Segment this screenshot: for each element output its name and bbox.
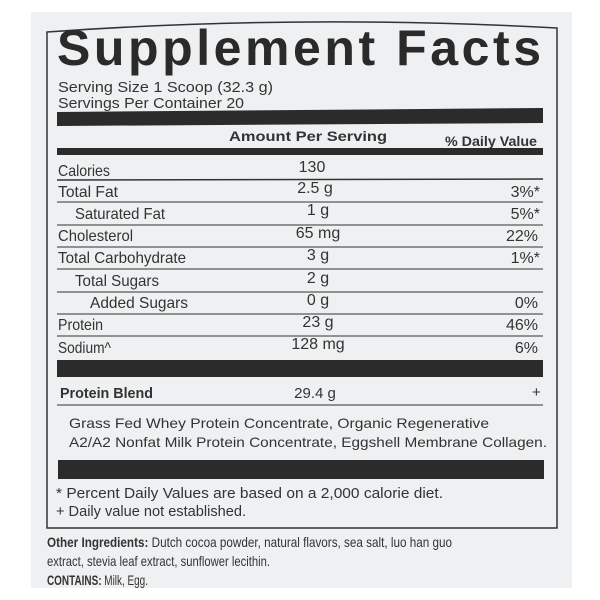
column header: [229, 128, 537, 149]
nutrient rows: Total Fat: [58, 184, 119, 201]
nutrient rows: 2.5 g: [297, 180, 333, 197]
header bar: [57, 148, 543, 155]
nutrient rows: Total Sugars: [75, 273, 159, 290]
nutrient rows: 22%: [506, 228, 538, 245]
facts box: [47, 20, 557, 528]
middle thick bar: [57, 360, 543, 377]
nutrient rows: Total Carbohydrate: [58, 250, 186, 267]
nutrient rows: [57, 159, 543, 357]
nutrient rows: 3 g: [307, 247, 329, 264]
nutrient rows: 2 g: [307, 270, 329, 287]
nutrient rows: 1 g: [307, 202, 329, 219]
serving info: Serving Size 1 Scoop (32.3 g): [58, 79, 273, 96]
serving info: Servings Per Container 20: [58, 95, 244, 112]
lower thick bar: [58, 460, 544, 479]
other ingredients: extract, stevia leaf extract, sunflower lecithin.: [47, 553, 270, 569]
footnotes: * Percent Daily Values are based on a 2,000 calorie diet.: [56, 485, 443, 502]
column header: % Daily Value: [445, 133, 537, 149]
nutrient rows: 5%*: [511, 206, 540, 223]
blend ingredients: A2/A2 Nonfat Milk Protein Concentrate, Eggshell Membrane Collagen.: [69, 434, 547, 450]
nutrient rows: 23 g: [302, 314, 334, 331]
other ingredients: CONTAINS: Milk, Egg.: [47, 572, 148, 588]
protein blend: +: [532, 384, 541, 401]
nutrient rows: Sodium^: [58, 340, 111, 357]
footnotes: [56, 485, 443, 520]
nutrient rows: 1%*: [511, 250, 540, 267]
nutrient rows: Added Sugars: [90, 295, 188, 312]
protein blend: [57, 384, 543, 405]
nutrient rows: Calories: [58, 163, 110, 180]
nutrient rows: 65 mg: [296, 225, 340, 242]
title: Supplement Facts: [57, 20, 541, 76]
other ingredients: [47, 534, 452, 588]
protein blend: Protein Blend: [60, 385, 153, 402]
nutrient rows: 0 g: [307, 292, 329, 309]
protein blend: 29.4 g: [294, 385, 336, 402]
nutrient rows: Saturated Fat: [75, 206, 166, 223]
other ingredients: Other Ingredients: Dutch cocoa powder, natural flavors, sea salt, luo han guo: [47, 534, 452, 550]
nutrient rows: 6%: [515, 340, 538, 357]
column header: Amount Per Serving: [229, 128, 387, 144]
footnotes: + Daily value not established.: [56, 503, 246, 520]
nutrient rows: 130: [299, 159, 325, 176]
serving info: [58, 79, 273, 112]
nutrient rows: Protein: [58, 317, 103, 334]
nutrient rows: 46%: [506, 317, 538, 334]
nutrient rows: 128 mg: [291, 336, 345, 353]
top thick bar: [57, 108, 543, 126]
blend ingredients: [69, 415, 547, 450]
nutrient rows: 3%*: [511, 184, 540, 201]
nutrient rows: Cholesterol: [58, 228, 133, 245]
nutrient rows: 0%: [515, 295, 538, 312]
blend ingredients: Grass Fed Whey Protein Concentrate, Organic Regenerative: [69, 415, 489, 431]
